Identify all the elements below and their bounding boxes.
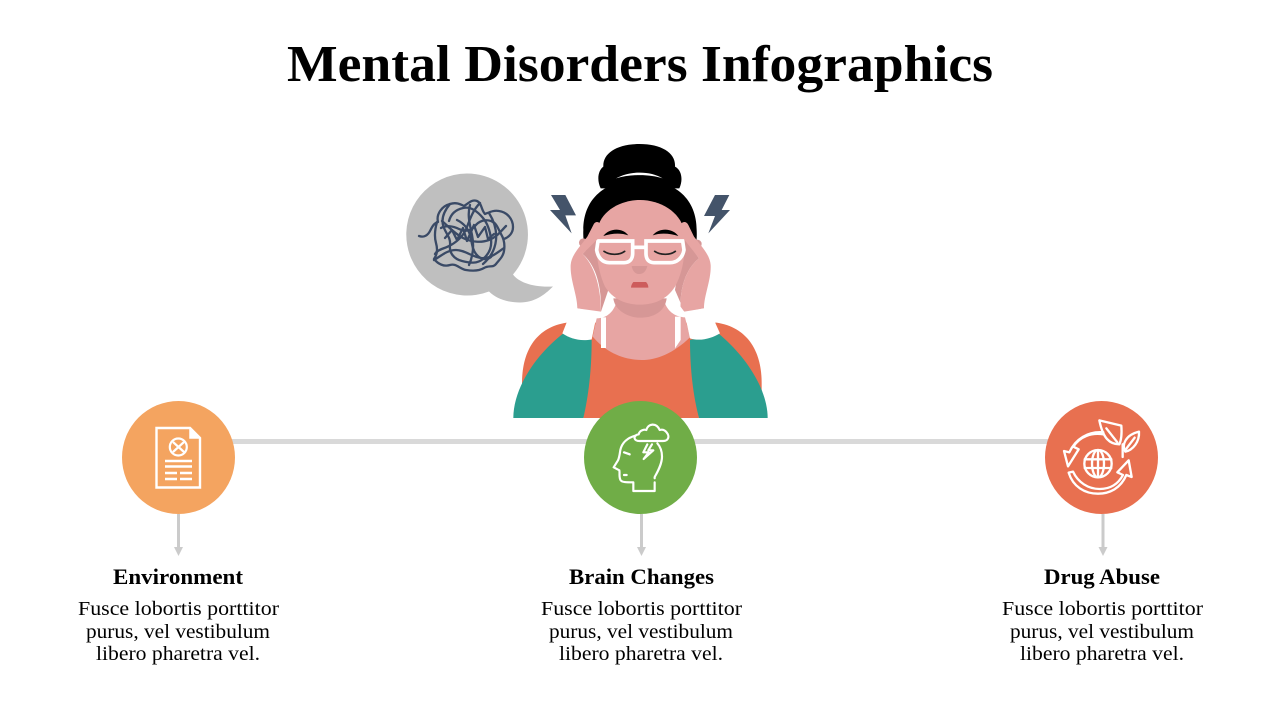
heading: Brain Changes (569, 564, 714, 589)
body text: Fusce lobortis porttitor (1002, 598, 1203, 620)
right hand (680, 222, 711, 312)
straps (601, 317, 606, 348)
right cuff (684, 307, 720, 340)
character: stressed woman (513, 144, 768, 418)
body text: libero pharetra vel. (559, 643, 723, 665)
right sleeve (690, 333, 768, 418)
left sleeve (513, 333, 592, 418)
item: drug abuse (1002, 401, 1203, 665)
circle: environment (122, 401, 235, 514)
nose (632, 266, 647, 274)
circle: brain changes (584, 401, 697, 514)
bolts (550, 195, 730, 233)
body text: Fusce lobortis porttitor (541, 598, 742, 620)
ears (579, 238, 588, 247)
eyebrows (603, 230, 678, 236)
icon: document (156, 428, 200, 488)
mouth (631, 282, 648, 288)
item: brain changes (541, 401, 742, 665)
glasses (597, 241, 684, 263)
body text: purus, vel vestibulum (1010, 621, 1194, 643)
heading: Environment (113, 564, 244, 589)
arrow (637, 514, 646, 556)
icon: globe with recycling arrows and leaves (1064, 420, 1139, 494)
body text (1002, 598, 1203, 665)
body text: Fusce lobortis porttitor (78, 598, 279, 620)
body text: libero pharetra vel. (96, 643, 260, 665)
connector line (230, 439, 1050, 444)
body text (541, 598, 742, 665)
body text (78, 598, 279, 665)
item: environment (78, 401, 279, 665)
hair (583, 144, 697, 262)
face (597, 200, 685, 305)
title: Mental Disorders Infographics (287, 36, 993, 93)
neck and chest (593, 298, 690, 360)
speech bubble with scribble (406, 174, 553, 302)
body text: purus, vel vestibulum (86, 621, 270, 643)
body text: libero pharetra vel. (1020, 643, 1184, 665)
closed eyes (604, 251, 675, 254)
hand shadows (583, 237, 608, 312)
left cuff (562, 307, 597, 340)
circle: drug abuse (1045, 401, 1158, 514)
heading: Drug Abuse (1044, 564, 1160, 589)
arrow (174, 514, 183, 556)
scribble (419, 200, 513, 271)
icon: head with storm (614, 425, 668, 491)
body text: purus, vel vestibulum (549, 621, 733, 643)
left hand (571, 222, 601, 312)
arrow (1098, 514, 1108, 556)
shirt (522, 323, 762, 397)
neck shadow (613, 298, 667, 318)
